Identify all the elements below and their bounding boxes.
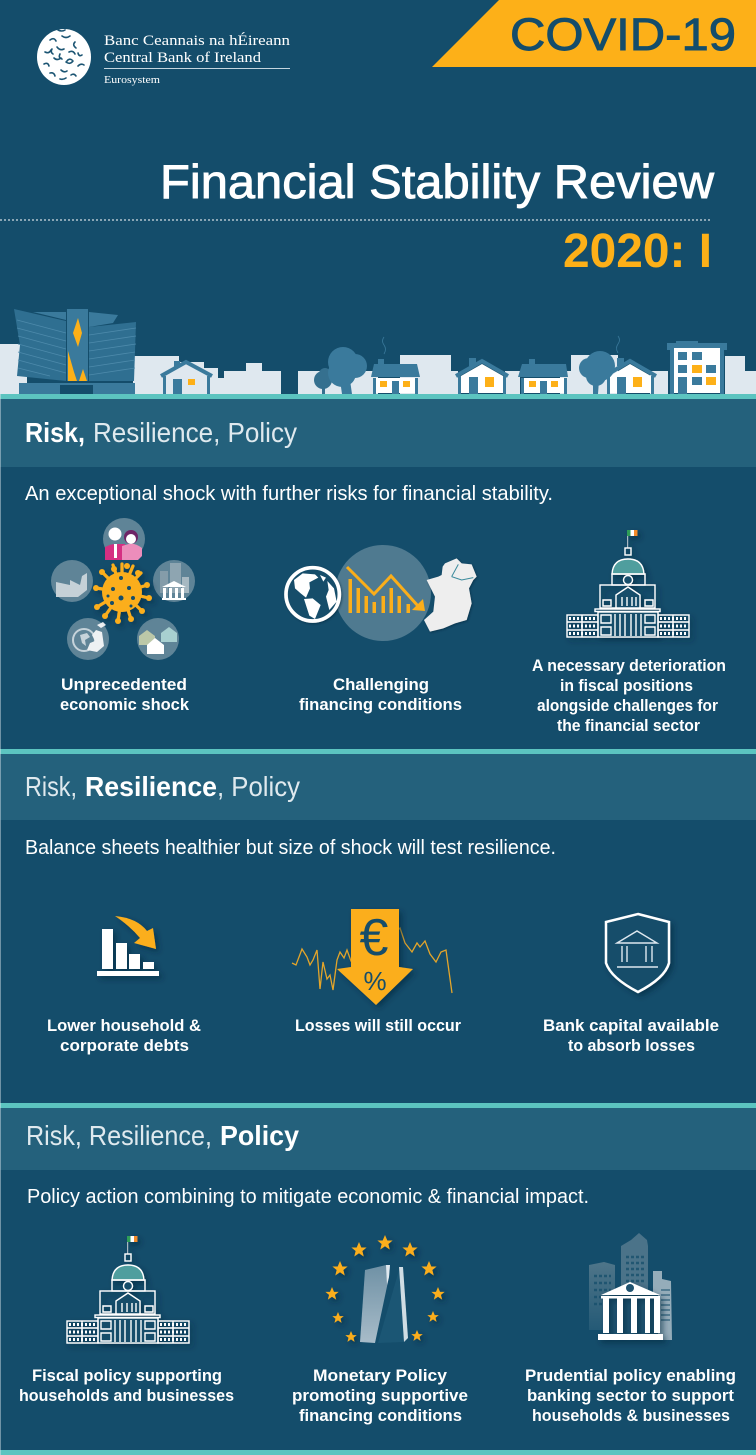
icon: shield with bank — [606, 914, 669, 992]
heading: resilience: , Policy — [217, 771, 300, 802]
label: lower debts: corporate debts — [60, 1036, 189, 1055]
heading: risk: Risk, — [25, 417, 85, 448]
label: financing conditions: Challenging — [333, 675, 429, 694]
label: bank capital — [543, 1016, 719, 1055]
text: risk summary: An exceptional shock with further risks for financial stability. — [25, 483, 553, 505]
background skyline — [0, 344, 756, 394]
label: prudential policy: banking sector to support — [527, 1386, 734, 1405]
panel: risk — [0, 394, 756, 735]
heading: risk: Resilience, Policy — [93, 417, 297, 448]
banner: COVID-19: COVID-19 — [510, 9, 736, 60]
banner: COVID-19 — [432, 0, 756, 67]
label: prudential policy: Prudential policy enabling — [525, 1366, 736, 1385]
label: losses: Losses will still occur — [295, 1016, 461, 1035]
city with bank — [160, 563, 189, 600]
label: bank capital: to absorb losses — [568, 1036, 695, 1055]
heading: resilience: Resilience — [85, 771, 217, 802]
label: unprecedented shock — [60, 675, 190, 714]
label: fiscal positions: in fiscal positions — [560, 676, 693, 695]
icon: lower debts — [97, 916, 159, 976]
text: resilience summary: Balance sheets healthier but size of shock will test resilience. — [25, 837, 556, 859]
label: prudential policy: households & businesses — [532, 1406, 730, 1425]
icon: government buildings — [567, 530, 689, 637]
logo: Central Bank of Ireland: Eurosystem — [104, 75, 160, 86]
label: monetary policy: promoting supportive — [292, 1386, 468, 1405]
houses — [139, 627, 177, 654]
label: monetary policy — [292, 1366, 468, 1425]
globe — [286, 568, 339, 621]
map of Ireland — [424, 558, 477, 632]
label: unprecedented shock: Unprecedented — [61, 675, 187, 694]
icon: ECB tower with euro stars — [325, 1235, 445, 1343]
label: fiscal positions: A necessary deterioration — [532, 656, 726, 675]
label: financing conditions: financing conditions — [299, 695, 462, 714]
label: fiscal positions: the financial sector — [557, 716, 700, 735]
logo emblem — [37, 29, 91, 85]
label: financing conditions — [299, 675, 462, 714]
logo: Central Bank of Ireland — [37, 29, 291, 86]
label: prudential policy — [525, 1366, 736, 1425]
houses — [161, 336, 656, 394]
label: fiscal policy — [19, 1366, 234, 1405]
label: monetary policy: financing conditions — [299, 1406, 462, 1425]
virus — [93, 563, 152, 624]
factory — [56, 573, 87, 597]
trees — [314, 347, 615, 394]
icon: financing conditions — [286, 545, 477, 641]
panel: resilience — [0, 749, 756, 1055]
label: lower debts: Lower household & — [47, 1016, 201, 1035]
label: fiscal policy: households and businesses — [19, 1386, 234, 1405]
apartment block — [667, 341, 727, 394]
people — [105, 528, 142, 560]
label: fiscal policy: Fiscal policy supporting — [32, 1366, 222, 1385]
icon: virus with affected sectors — [51, 518, 195, 660]
label: unprecedented shock: economic shock — [60, 695, 190, 714]
text: policy summary: Policy action combining to mitigate economic & financial impact. — [27, 1186, 589, 1208]
icon: bank and city — [589, 1233, 672, 1340]
heading: policy: Risk, Resilience, — [26, 1120, 212, 1151]
Titanic Belfast style building — [14, 309, 136, 394]
icon: euro loss arrow — [292, 909, 452, 1005]
heading: resilience — [25, 771, 300, 802]
logo: Central Bank of Ireland: Banc Ceannais na hÉireann — [104, 32, 291, 49]
falling chart — [347, 567, 425, 613]
label: bank capital: Bank capital available — [543, 1016, 719, 1035]
label: fiscal positions: alongside challenges for — [537, 696, 718, 715]
label: lower debts — [47, 1016, 201, 1055]
subtitle: edition: 2020: I — [563, 225, 712, 278]
title: Financial Stability Review — [160, 155, 715, 208]
label: fiscal positions — [532, 656, 726, 735]
icon: euro loss arrow: % — [363, 966, 387, 996]
icon: government buildings — [67, 1236, 189, 1343]
illustration: city skyline — [0, 309, 756, 394]
heading: resilience: Risk, — [25, 771, 77, 802]
label: monetary policy: Monetary Policy — [313, 1366, 448, 1385]
heading: policy: Policy — [220, 1120, 299, 1151]
icon: euro loss arrow: € — [360, 909, 389, 967]
logo: Central Bank of Ireland: Central Bank of Ireland — [104, 50, 262, 66]
panel: policy — [0, 1103, 756, 1425]
globe and Ireland — [73, 622, 106, 652]
